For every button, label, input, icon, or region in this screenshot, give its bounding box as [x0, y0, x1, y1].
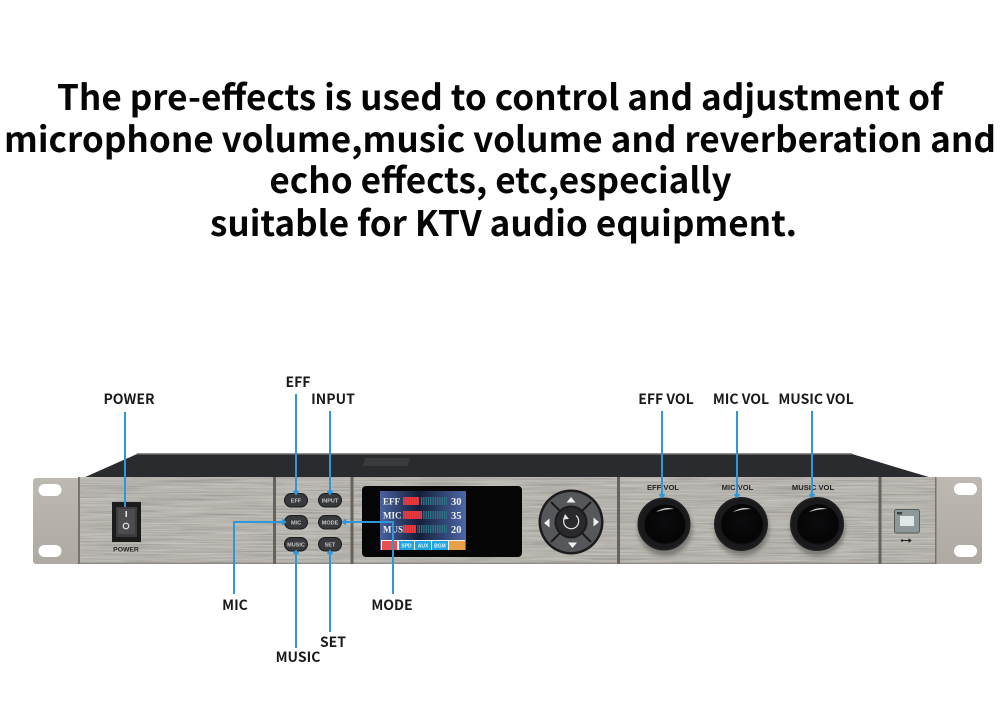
- callout: SET: [320, 551, 346, 652]
- button: MODE: MODE: [322, 520, 339, 526]
- display: 30: [451, 497, 462, 508]
- display: [362, 486, 522, 557]
- callout: MIC VOL: [713, 389, 769, 497]
- USB port: [894, 510, 920, 542]
- display: 20: [451, 525, 462, 536]
- knob: MIC VOL: [715, 483, 769, 556]
- callout: EFF VOL: [638, 389, 694, 497]
- source bar: [381, 540, 465, 550]
- callout: INPUT: INPUT: [311, 389, 355, 409]
- callout: POWER: POWER: [103, 389, 155, 409]
- source bar: SPD: [401, 544, 412, 550]
- display: 35: [451, 511, 462, 522]
- title: [4, 70, 996, 247]
- callout: MIC: MIC: [222, 595, 248, 615]
- callout: INPUT: [311, 389, 355, 494]
- callout: EFF: EFF: [286, 372, 310, 392]
- callout: MIC VOL: MIC VOL: [713, 389, 769, 409]
- display: EFF: [383, 496, 401, 506]
- audio processor device: [33, 453, 982, 564]
- callout: SET: SET: [320, 632, 346, 652]
- knob: EFF VOL: EFF VOL: [647, 483, 679, 492]
- front panel: [78, 477, 936, 564]
- callout: MODE: [343, 520, 413, 615]
- left rack ear: [33, 478, 79, 564]
- navigation pad: [538, 490, 604, 554]
- power switch: [112, 502, 141, 554]
- callout: MUSIC VOL: [778, 389, 854, 497]
- knob: MUSIC VOL: [791, 483, 845, 556]
- callout: POWER: [103, 389, 155, 507]
- callout: MODE: MODE: [371, 595, 413, 615]
- title: The pre-effects is used to control and adjustment of: [57, 70, 945, 121]
- source bar: AUX: [418, 544, 429, 550]
- button: MUSIC: MUSIC: [287, 542, 305, 548]
- right rack ear: [936, 477, 982, 564]
- button: MIC: MIC: [291, 520, 301, 526]
- knob: EFF VOL: [638, 483, 692, 556]
- button: INPUT: INPUT: [322, 498, 339, 504]
- button: SET: SET: [325, 542, 336, 548]
- callout: EFF VOL: EFF VOL: [638, 389, 694, 409]
- callout: EFF: [286, 372, 310, 494]
- callout: MUSIC: [276, 551, 320, 667]
- button group: [284, 494, 342, 551]
- title: suitable for KTV audio equipment.: [210, 196, 797, 247]
- callout: MUSIC VOL: MUSIC VOL: [778, 389, 854, 409]
- level meters: [403, 497, 447, 533]
- knob: MIC VOL: MIC VOL: [722, 483, 754, 492]
- title: microphone volume,music volume and reverberation and: [4, 112, 996, 163]
- display: MIC: [383, 510, 402, 520]
- power switch: POWER: [113, 546, 139, 554]
- callout: MIC: [222, 520, 285, 615]
- button: EFF: EFF: [291, 498, 302, 504]
- callout: MUSIC: MUSIC: [276, 647, 320, 667]
- knob: MUSIC VOL: MUSIC VOL: [792, 483, 834, 492]
- title: echo effects, etc,especially: [269, 153, 732, 204]
- display: MUS: [383, 524, 403, 534]
- source bar: BGM: [434, 544, 446, 550]
- chassis top: [83, 454, 932, 478]
